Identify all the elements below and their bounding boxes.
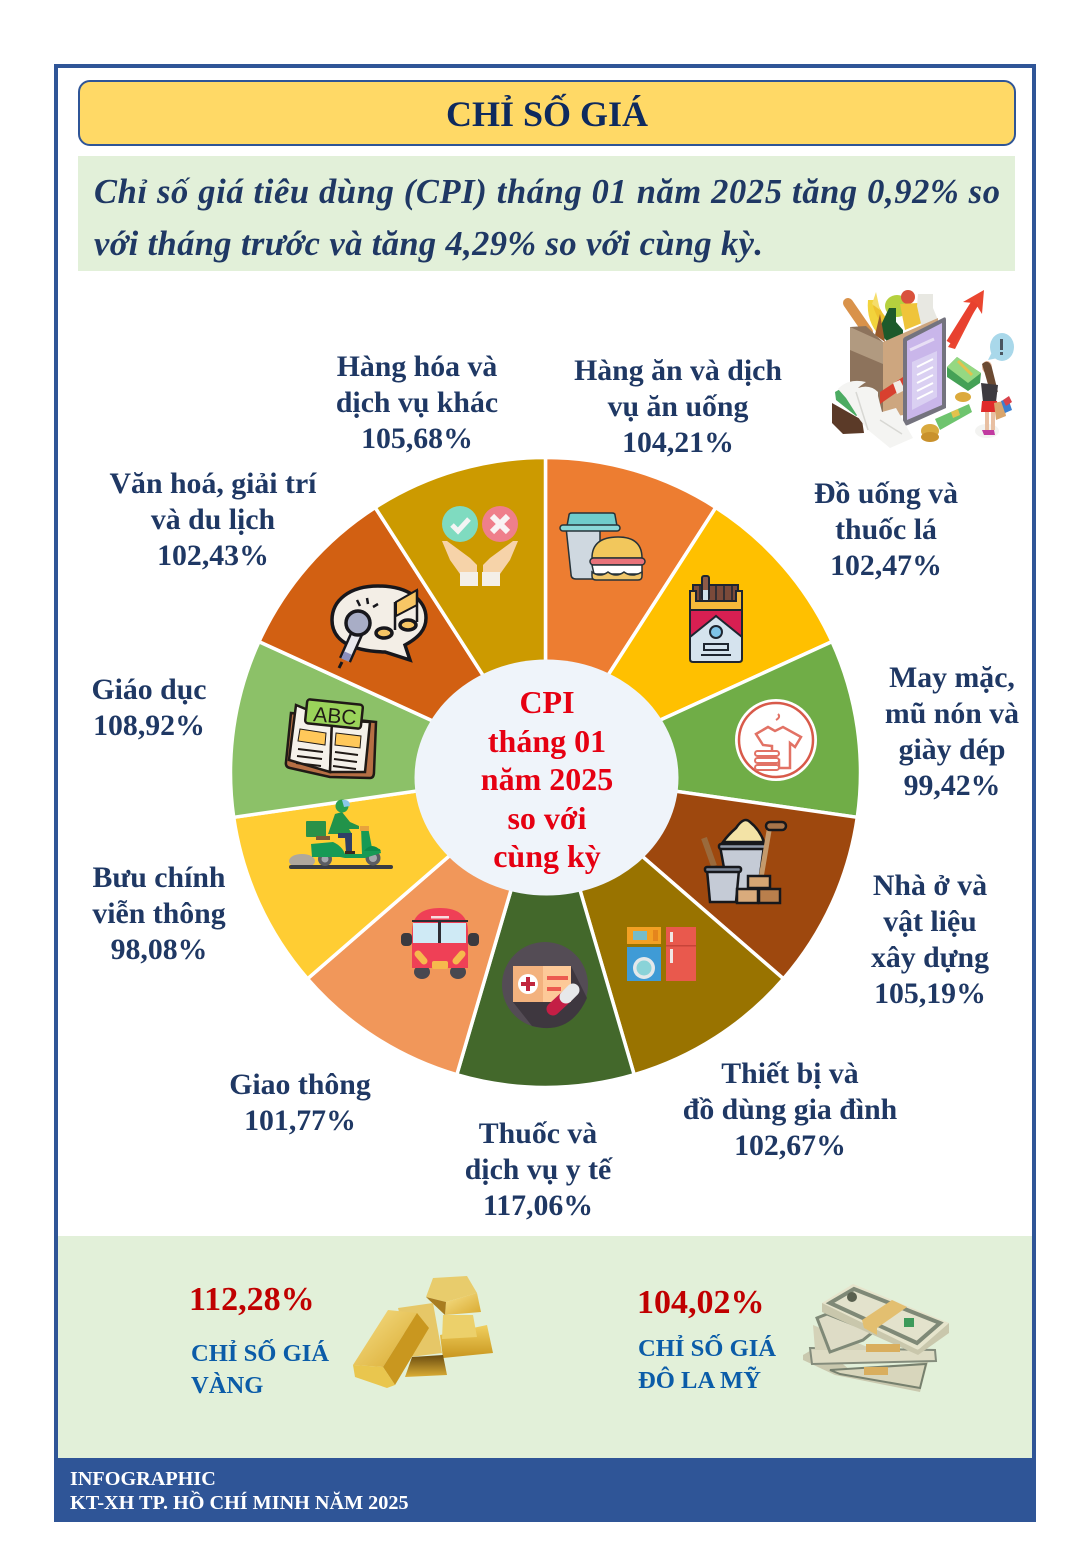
slice: post and telecom xyxy=(234,772,545,979)
slice: medicine xyxy=(457,772,634,1087)
icon: cigarette pack xyxy=(690,576,742,662)
label: medicine: dịch vụ y tế xyxy=(465,1153,613,1186)
label: clothing xyxy=(885,661,1019,802)
gold index value: 112,28% xyxy=(189,1281,315,1318)
label: education: 108,92% xyxy=(93,709,205,742)
icon: hands with check and cross xyxy=(442,506,518,586)
label: housing: vật liệu xyxy=(883,905,977,938)
gold index label: CHỈ SỐ GIÁ xyxy=(191,1338,329,1367)
label: drinks and tobacco xyxy=(814,477,958,582)
wheel centre label xyxy=(414,660,678,896)
icon: building materials xyxy=(704,820,786,903)
title banner: CHỈ SỐ GIÁ xyxy=(446,93,648,134)
gold index label: VÀNG xyxy=(191,1371,263,1399)
dollar index label: CHỈ SỐ GIÁ xyxy=(638,1333,776,1362)
label: food and catering: 104,21% xyxy=(622,426,734,459)
label: post and telecom: 98,08% xyxy=(111,933,207,966)
label: medicine xyxy=(465,1117,613,1222)
label: culture and tourism: 102,43% xyxy=(157,539,269,572)
label: clothing: May mặc, xyxy=(889,661,1015,694)
label: drinks and tobacco: thuốc lá xyxy=(835,513,937,546)
label: drinks and tobacco: Đồ uống và xyxy=(814,477,958,510)
label: food and catering: Hàng ăn và dịch xyxy=(574,354,782,387)
wheel centre label: cùng kỳ xyxy=(493,838,601,874)
subtitle panel: Chỉ số giá tiêu dùng (CPI) tháng 01 năm 2025 tăng 0,92% so xyxy=(94,173,1000,211)
icon: delivery scooter xyxy=(289,800,393,869)
label: clothing: 99,42% xyxy=(904,769,1000,802)
label: clothing: mũ nón và xyxy=(885,697,1019,730)
icon: open book with ABC: ABC xyxy=(312,703,357,730)
icon: household appliances xyxy=(627,927,696,981)
label: other goods and services: Hàng hóa và xyxy=(337,350,497,383)
illustration: shopping and rising prices xyxy=(832,290,1014,448)
wheel centre label: năm 2025 xyxy=(481,761,613,797)
label: education xyxy=(91,673,207,742)
label: education: Giáo dục xyxy=(91,673,207,706)
label: medicine: Thuốc và xyxy=(479,1117,597,1150)
slice: housing xyxy=(546,772,857,979)
label: medicine: 117,06% xyxy=(483,1189,593,1222)
icon: bus xyxy=(401,908,479,979)
footer band xyxy=(54,1458,1036,1522)
label: other goods and services: dịch vụ khác xyxy=(336,386,498,419)
slice: culture and tourism xyxy=(259,508,546,772)
icon: microphone and music xyxy=(332,586,426,668)
icon: dollar bundles xyxy=(803,1284,949,1392)
label: transport: 101,77% xyxy=(244,1104,356,1137)
icon: food xyxy=(560,513,645,580)
label: housing: 105,19% xyxy=(874,977,986,1010)
dollar index label: ĐÔ LA MỸ xyxy=(638,1365,761,1394)
label: housing: Nhà ở và xyxy=(873,869,987,902)
icon: medicine xyxy=(502,942,588,1028)
dollar index label xyxy=(638,1333,776,1394)
slice: transport xyxy=(308,772,546,1075)
icon: gold bars xyxy=(353,1276,493,1388)
label: household goods: Thiết bị và xyxy=(721,1057,859,1090)
label: other goods and services xyxy=(336,350,498,455)
label: food and catering: vụ ăn uống xyxy=(608,390,748,423)
dollar index value: 104,02% xyxy=(637,1284,764,1321)
gold index label xyxy=(191,1338,329,1399)
panel: gold and US dollar indices xyxy=(58,1236,1032,1458)
label: post and telecom: viễn thông xyxy=(92,897,226,930)
slice: drinks and tobacco xyxy=(546,508,832,772)
label: post and telecom xyxy=(92,861,226,966)
slice: clothing xyxy=(546,642,860,817)
label: culture and tourism xyxy=(110,467,317,572)
slice: other goods xyxy=(375,458,546,772)
label: household goods: 102,67% xyxy=(734,1129,846,1162)
wheel centre label: tháng 01 xyxy=(488,723,606,759)
wheel centre label: so với xyxy=(507,800,587,836)
label: housing xyxy=(871,869,989,1010)
label: housing: xây dựng xyxy=(871,941,989,974)
subtitle panel: với tháng trước và tăng 4,29% so với cùng kỳ. xyxy=(94,225,763,263)
label: food and catering xyxy=(574,354,782,459)
label: transport: Giao thông xyxy=(229,1068,371,1101)
slice: household goods xyxy=(546,772,784,1075)
label: household goods xyxy=(683,1057,898,1162)
subtitle panel xyxy=(78,156,1015,271)
label: culture and tourism: Văn hoá, giải trí xyxy=(110,467,317,500)
icon: clothing badge xyxy=(735,699,817,781)
footer band: KT-XH TP. HỒ CHÍ MINH NĂM 2025 xyxy=(70,1490,409,1514)
footer band: INFOGRAPHIC xyxy=(70,1468,216,1490)
label: transport xyxy=(229,1068,371,1137)
slice: food xyxy=(546,457,716,772)
wheel centre label: CPI xyxy=(519,684,575,720)
icon: open book with ABC xyxy=(286,699,376,778)
label: other goods and services: 105,68% xyxy=(361,422,473,455)
label: household goods: đồ dùng gia đình xyxy=(683,1093,898,1126)
label: clothing: giày dép xyxy=(899,733,1005,766)
label: post and telecom: Bưu chính xyxy=(92,861,226,894)
slice: education xyxy=(231,642,546,817)
label: drinks and tobacco: 102,47% xyxy=(830,549,942,582)
chart: CPI wheel, eleven equal slices xyxy=(231,457,860,1087)
title banner xyxy=(79,81,1015,145)
label: culture and tourism: và du lịch xyxy=(151,503,276,536)
